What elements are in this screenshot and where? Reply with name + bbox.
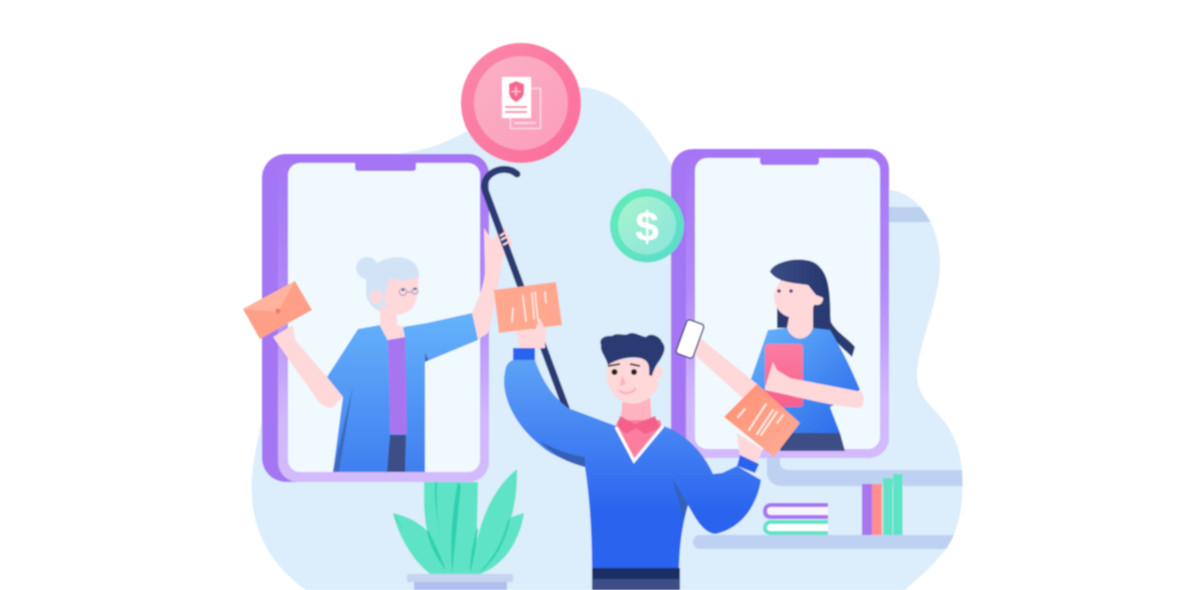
top (750, 328, 860, 433)
face (774, 276, 816, 318)
ear (811, 293, 823, 305)
neck (787, 305, 813, 338)
envelope (243, 281, 312, 339)
document lines (505, 107, 527, 112)
walking cane (484, 169, 566, 408)
cuff (513, 348, 535, 360)
hair (600, 333, 665, 376)
wall shelves (693, 207, 980, 549)
plus (512, 87, 520, 96)
right cuff (737, 455, 759, 473)
young woman (675, 260, 864, 451)
jacket (327, 313, 478, 472)
left arm (273, 325, 343, 408)
glasses (400, 288, 418, 296)
eyes (777, 289, 793, 293)
trousers (387, 435, 406, 472)
hand fingers over paper (535, 318, 545, 330)
back document (510, 88, 540, 128)
shield (509, 81, 524, 102)
back hair (777, 260, 855, 357)
right phone frame (671, 149, 889, 458)
right hand (737, 433, 763, 465)
head (384, 277, 418, 315)
raised right arm (472, 226, 513, 340)
dollar sign: $ (635, 203, 659, 250)
arm with phone (693, 338, 757, 402)
neck (380, 305, 405, 341)
books stacked (765, 505, 828, 533)
upright books (862, 474, 902, 535)
background blob (252, 87, 963, 590)
left phone frame (262, 154, 489, 482)
illustration (242, 42, 964, 590)
raised hand (516, 328, 546, 350)
ear (653, 366, 663, 378)
skirt (780, 433, 845, 451)
phone (675, 319, 705, 359)
purple top (388, 337, 407, 434)
eyes (402, 288, 416, 291)
sweater (504, 360, 761, 568)
neck (620, 395, 652, 428)
ear (370, 290, 382, 304)
orange paper near man (724, 384, 800, 457)
plant in pot (393, 469, 524, 590)
jacket shading (333, 353, 429, 472)
insurance document badge (461, 43, 581, 163)
collar shirt (615, 420, 662, 460)
orange paper held by man (494, 282, 562, 333)
sweater shadow (540, 441, 688, 520)
trousers (592, 579, 680, 590)
dollar coin (610, 188, 684, 262)
lower line (514, 122, 536, 124)
belt (592, 568, 680, 579)
face features (608, 364, 640, 393)
head (607, 358, 658, 404)
man (504, 328, 763, 590)
old woman (243, 226, 513, 472)
forearm (765, 362, 864, 408)
hair with bun (356, 257, 419, 313)
old woman's fingers on cane (500, 232, 510, 245)
pink tablet (765, 344, 803, 407)
bangs (770, 260, 829, 300)
front document (502, 77, 531, 118)
v-neck trim (616, 426, 663, 461)
bow collar (617, 416, 660, 434)
